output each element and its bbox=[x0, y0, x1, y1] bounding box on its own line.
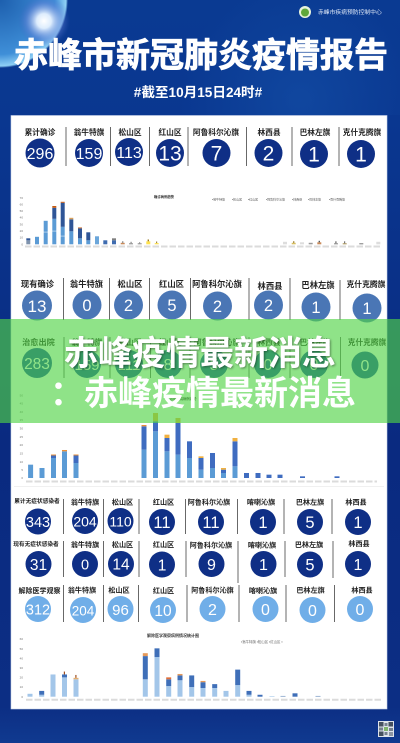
chart title: 确诊病例趋势 bbox=[154, 194, 175, 199]
stat: 阿鲁科尔沁旗 11: 11 bbox=[202, 514, 220, 532]
stat: 红山区 10 bbox=[150, 586, 176, 623]
stat: 红山区 10: 10 bbox=[154, 603, 172, 620]
stat: 阿鲁科尔沁旗 11 bbox=[188, 498, 230, 535]
stat: 林西县 2: 林西县 bbox=[257, 127, 281, 137]
stat: 松山区 2: 2 bbox=[124, 297, 133, 315]
stat: 红山区 1: 1 bbox=[158, 558, 166, 574]
stats row: current asymptomatic bbox=[13, 539, 371, 583]
header logo: disease control center: 赤峰市疾病预防控制中心 bbox=[318, 8, 382, 16]
stat: 巴林左旗 0 bbox=[300, 337, 331, 378]
stat: 松山区 113: 松山区 bbox=[118, 127, 142, 137]
stat: 阿鲁科尔沁旗 7: 阿鲁科尔沁旗 bbox=[193, 127, 239, 137]
y axis labels: 0 bbox=[21, 242, 23, 246]
stat: 治愈出院 283: 治愈出院 bbox=[22, 337, 55, 347]
y axis labels: 0 bbox=[21, 695, 23, 699]
stat: 巴林左旗 1: 1 bbox=[308, 144, 320, 166]
stacked bars bbox=[28, 648, 320, 697]
stat: 巴林左旗 1: 1 bbox=[311, 299, 321, 317]
stat: 红山区 5: 5 bbox=[167, 297, 177, 315]
chart legend: ▪翁牛特旗 ▪松山区 ▪红山区 ▪ bbox=[241, 639, 283, 644]
stat: 阿鲁科尔沁旗 11: 阿鲁科尔沁旗 bbox=[188, 498, 230, 506]
header logo: disease control center bbox=[299, 6, 382, 18]
stat: 松山区 110: 松山区 bbox=[112, 498, 133, 506]
stat: 现有无症状感染者 31 bbox=[13, 540, 59, 577]
stat: 喀喇沁旗 0: 0 bbox=[261, 602, 270, 619]
banner headline line 2: ：赤峰疫情最新消息 bbox=[50, 375, 356, 413]
y axis labels bbox=[20, 394, 23, 480]
chart legend: ▪红山区 bbox=[248, 196, 258, 202]
stat: 巴林左旗 5 bbox=[295, 540, 323, 578]
stat: 现有确诊 13: 现有确诊 bbox=[21, 279, 55, 289]
y axis labels: 20 bbox=[20, 443, 23, 447]
stat: 松山区 110 bbox=[108, 498, 134, 534]
stat: 红山区 8: 8 bbox=[164, 357, 173, 374]
stat: 翁牛特旗 0: 翁牛特旗 bbox=[70, 279, 104, 289]
stat: 松山区 14: 14 bbox=[112, 556, 130, 574]
y axis labels: 20 bbox=[20, 676, 23, 680]
stat: 阿鲁科尔沁旗 2: 2 bbox=[208, 602, 217, 619]
stat: 喀喇沁旗 1 bbox=[248, 540, 276, 577]
stat: 红山区 13: 红山区 bbox=[158, 127, 182, 137]
stat: 喀喇沁旗 1: 1 bbox=[258, 514, 268, 532]
stat: 阿鲁科尔沁旗 2: 阿鲁科尔沁旗 bbox=[191, 586, 234, 594]
stat: 解除医学观察 312: 解除医学观察 bbox=[18, 586, 60, 595]
stat: 巴林左旗 5: 5 bbox=[305, 556, 315, 574]
stacked bars bbox=[26, 202, 380, 244]
chart title: 解除医学观察病例情况统计图 bbox=[147, 632, 199, 638]
banner headline line 1: 赤峰疫情最新消息 bbox=[64, 335, 336, 373]
stat: 林西县 2 bbox=[254, 281, 283, 320]
stat: 林西县 1: 林西县 bbox=[345, 498, 367, 506]
stat: 林西县 1: 林西县 bbox=[348, 539, 370, 548]
chart legend: ▪巴林左旗 bbox=[308, 196, 321, 202]
y axis labels bbox=[20, 637, 23, 699]
stat: 克什克腾旗 0: 克什克腾旗 bbox=[348, 337, 387, 347]
chart: cured cases by date bbox=[14, 394, 384, 487]
y axis labels: 45 bbox=[20, 402, 23, 406]
stat: 林西县 2: 林西县 bbox=[258, 281, 282, 291]
stat: 翁牛特旗 204: 204 bbox=[72, 604, 95, 618]
stat: 巴林左旗 0: 0 bbox=[308, 603, 317, 620]
stat: 松山区 111: 松山区 bbox=[118, 337, 142, 347]
stat: 累计确诊 296 bbox=[25, 127, 56, 168]
y axis labels: 40 bbox=[20, 656, 23, 660]
stat: 喀喇沁旗 1: 喀喇沁旗 bbox=[248, 540, 276, 550]
y axis labels: 15 bbox=[20, 452, 23, 456]
stat: 松山区 111: 111 bbox=[118, 357, 140, 374]
title: 赤峰市新冠肺炎疫情报告 bbox=[14, 37, 388, 75]
stat: 阿鲁科尔沁旗 2: 阿鲁科尔沁旗 bbox=[192, 279, 243, 289]
stat: 林西县 0: 0 bbox=[356, 602, 365, 619]
stat: 喀喇沁旗 1: 1 bbox=[259, 557, 268, 574]
decorative planet and light flare bbox=[0, 0, 70, 68]
stat: 林西县 2: 2 bbox=[263, 142, 274, 166]
stat: 松山区 111 bbox=[115, 337, 143, 378]
stat: 阿鲁科尔沁旗 5: 阿鲁科尔沁旗 bbox=[194, 337, 240, 347]
stat: 巴林左旗 0: 巴林左旗 bbox=[296, 586, 325, 594]
stat: 红山区 1 bbox=[149, 540, 175, 578]
stat: 林西县 0 bbox=[347, 586, 373, 622]
stat: 阿鲁科尔沁旗 9: 阿鲁科尔沁旗 bbox=[190, 540, 232, 550]
y axis labels: 40 bbox=[20, 216, 23, 220]
stat: 喀喇沁旗 0: 喀喇沁旗 bbox=[249, 586, 277, 595]
stat: 阿鲁科尔沁旗 2 bbox=[192, 279, 243, 320]
chart legend: ▪松山区 bbox=[232, 196, 242, 202]
y axis labels: 10 bbox=[20, 685, 23, 689]
stat: 克什克腾旗 0 bbox=[348, 337, 387, 378]
stat: 现有无症状感染者 31: 31 bbox=[30, 557, 47, 574]
stat: 松山区 113: 113 bbox=[116, 145, 142, 162]
stat: 翁牛特旗 0 bbox=[70, 279, 104, 320]
stat: 林西县 2 bbox=[254, 127, 282, 167]
y axis labels: 0 bbox=[21, 476, 23, 480]
y axis labels: 5 bbox=[21, 468, 23, 472]
y axis labels: 10 bbox=[20, 460, 23, 464]
stat: 红山区 5: 红山区 bbox=[159, 279, 184, 289]
chart legend: ▪克什克腾旗 bbox=[329, 196, 345, 202]
stats row: cured and discharged bbox=[22, 337, 387, 378]
stat: 红山区 1: 红山区 bbox=[153, 540, 174, 549]
stat: 红山区 10: 红山区 bbox=[153, 586, 174, 595]
stat: 翁牛特旗 159 bbox=[72, 337, 103, 378]
stats row: cumulative asymptomatic bbox=[14, 497, 371, 535]
stat: 翁牛特旗 159: 159 bbox=[74, 357, 100, 374]
y axis labels: 10 bbox=[20, 236, 23, 240]
stat: 累计确诊 296: 累计确诊 bbox=[25, 127, 56, 137]
stat: 累计确诊 296: 296 bbox=[27, 146, 53, 163]
stacked bars bbox=[28, 413, 339, 478]
stat: 红山区 8 bbox=[154, 337, 182, 378]
stat: 翁牛特旗 204 bbox=[71, 498, 99, 534]
stat: 松山区 2 bbox=[114, 279, 143, 320]
stat: 翁牛特旗 0 bbox=[71, 540, 99, 577]
stat: 治愈出院 283: 283 bbox=[24, 356, 50, 373]
green overlay banner bbox=[0, 319, 400, 423]
y axis labels: 30 bbox=[20, 426, 23, 430]
stat: 翁牛特旗 159: 翁牛特旗 bbox=[74, 127, 105, 137]
stat: 巴林左旗 5: 巴林左旗 bbox=[295, 540, 323, 549]
y axis labels: 70 bbox=[20, 196, 23, 200]
y axis labels: 60 bbox=[20, 202, 23, 206]
chart legend: ▪林西县 bbox=[292, 196, 302, 202]
stat: 翁牛特旗 204 bbox=[68, 586, 96, 623]
stat: 喀喇沁旗 0 bbox=[249, 586, 278, 622]
y axis labels: 60 bbox=[20, 637, 23, 641]
stat: 阿鲁科尔沁旗 5 bbox=[194, 337, 240, 378]
stats row: released from medical observation bbox=[18, 585, 373, 623]
stat: 克什克腾旗 1 bbox=[343, 127, 382, 168]
stat: 松山区 110: 110 bbox=[109, 514, 132, 530]
stat: 林西县 2: 2 bbox=[264, 297, 273, 315]
stat: 解除医学观察 312: 312 bbox=[26, 602, 50, 618]
y axis labels: 50 bbox=[20, 647, 23, 651]
stat: 克什克腾旗 0: 0 bbox=[361, 358, 370, 375]
stat: 红山区 8: 红山区 bbox=[158, 337, 182, 347]
stat: 阿鲁科尔沁旗 7 bbox=[193, 127, 239, 167]
stat: 松山区 14 bbox=[108, 540, 134, 577]
chart: confirmed cases by date bbox=[20, 194, 382, 246]
stats row: current confirmed bbox=[21, 278, 386, 322]
chart legend bbox=[212, 196, 345, 202]
subtitle: report date: #截至10月15日24时# bbox=[134, 84, 263, 100]
chart: released from observation by date bbox=[20, 632, 382, 700]
stat: 治愈出院 283 bbox=[22, 337, 55, 378]
stat: 现有确诊 13 bbox=[21, 279, 55, 320]
chart legend: ▪翁牛特旗 bbox=[212, 196, 225, 202]
stat: 喀喇沁旗 1 bbox=[247, 498, 276, 535]
stat: 阿鲁科尔沁旗 5: 5 bbox=[210, 357, 219, 374]
stat: 克什克腾旗 1: 1 bbox=[362, 300, 372, 318]
y axis labels: 35 bbox=[20, 418, 23, 422]
stat: 翁牛特旗 159: 翁牛特旗 bbox=[72, 337, 103, 347]
stat: 巴林左旗 0 bbox=[296, 586, 326, 623]
stat: 红山区 11: 红山区 bbox=[153, 498, 174, 506]
stat: 松山区 2: 松山区 bbox=[118, 279, 142, 289]
stat: 红山区 5 bbox=[158, 279, 186, 320]
chart legend: ▪阿鲁科尔沁旗 bbox=[266, 196, 285, 202]
stat: 巴林左旗 0: 0 bbox=[310, 357, 319, 374]
stat: 现有确诊 13: 13 bbox=[28, 297, 46, 316]
stat: 累计无症状感染者 343: 343 bbox=[26, 515, 50, 531]
stat: 阿鲁科尔沁旗 9: 9 bbox=[207, 557, 216, 574]
QR code bbox=[378, 721, 394, 737]
y axis labels: 30 bbox=[20, 666, 23, 670]
stat: 红山区 13: 13 bbox=[158, 142, 182, 166]
stat: 松山区 14: 松山区 bbox=[112, 540, 133, 549]
stats row: cumulative confirmed bbox=[25, 127, 382, 168]
stat: 克什克腾旗 1: 1 bbox=[355, 144, 367, 166]
stat: 林西县 1: 1 bbox=[353, 514, 363, 532]
stat: 松山区 96: 松山区 bbox=[108, 586, 130, 594]
stat: 喀喇沁旗 1: 喀喇沁旗 bbox=[247, 498, 275, 506]
stat: 阿鲁科尔沁旗 9 bbox=[190, 540, 232, 577]
y axis labels: 25 bbox=[20, 435, 23, 439]
stat: 阿鲁科尔沁旗 2 bbox=[191, 586, 234, 622]
stat: 松山区 96: 96 bbox=[112, 602, 129, 619]
y axis labels: 50 bbox=[20, 209, 23, 213]
stat: 松山区 113 bbox=[115, 127, 143, 166]
stat: 翁牛特旗 0: 0 bbox=[81, 558, 89, 574]
y axis labels: 20 bbox=[20, 229, 23, 233]
stat: 巴林左旗 1 bbox=[301, 280, 335, 322]
stat: 现有无症状感染者 31: 现有无症状感染者 bbox=[13, 540, 59, 548]
stat: 翁牛特旗 204: 204 bbox=[73, 514, 97, 530]
stat: 林西县 1 bbox=[345, 498, 371, 535]
y axis labels: 50 bbox=[20, 394, 23, 398]
white content panel bbox=[11, 116, 387, 709]
stat: 翁牛特旗 0: 翁牛特旗 bbox=[71, 540, 99, 549]
stat: 克什克腾旗 1: 克什克腾旗 bbox=[343, 127, 382, 137]
stat: 松山区 96 bbox=[108, 586, 134, 622]
stat: 巴林左旗 0: 巴林左旗 bbox=[300, 337, 331, 347]
stat: 林西县 0: 0 bbox=[264, 357, 273, 374]
stat: 翁牛特旗 204: 翁牛特旗 bbox=[71, 498, 99, 506]
stat: 林西县 1 bbox=[345, 539, 371, 577]
stat: 林西县 1: 1 bbox=[354, 557, 363, 574]
stat: 翁牛特旗 204: 翁牛特旗 bbox=[68, 586, 96, 594]
stat: 巴林左旗 5 bbox=[296, 498, 324, 535]
stat: 翁牛特旗 0: 0 bbox=[82, 297, 92, 315]
stat: 红山区 11 bbox=[149, 498, 175, 535]
chart title: 治愈出院病例趋势 bbox=[169, 396, 197, 401]
stat: 巴林左旗 5: 5 bbox=[305, 514, 315, 532]
stat: 林西县 0 bbox=[254, 337, 282, 378]
y axis labels bbox=[20, 196, 23, 246]
stat: 翁牛特旗 159: 159 bbox=[76, 146, 102, 163]
stat: 巴林左旗 1: 巴林左旗 bbox=[300, 127, 331, 137]
stat: 克什克腾旗 1: 克什克腾旗 bbox=[347, 279, 386, 289]
stat: 红山区 11: 11 bbox=[153, 514, 171, 532]
stat: 累计无症状感染者 343 bbox=[14, 497, 60, 534]
stat: 林西县 0: 林西县 bbox=[257, 337, 281, 347]
y axis labels: 30 bbox=[20, 222, 23, 226]
stat: 红山区 13 bbox=[156, 127, 184, 167]
stat: 林西县 0: 林西县 bbox=[351, 586, 373, 594]
stat: 巴林左旗 1: 巴林左旗 bbox=[301, 280, 335, 290]
stat: 解除医学观察 312 bbox=[18, 586, 60, 622]
stat: 巴林左旗 1 bbox=[300, 127, 331, 168]
stat: 阿鲁科尔沁旗 2: 2 bbox=[213, 298, 222, 316]
stat: 累计无症状感染者 343: 累计无症状感染者 bbox=[14, 497, 60, 505]
stat: 阿鲁科尔沁旗 7: 7 bbox=[211, 142, 222, 166]
stat: 翁牛特旗 159 bbox=[74, 127, 105, 167]
stat: 巴林左旗 5: 巴林左旗 bbox=[296, 498, 324, 506]
y axis labels: 40 bbox=[20, 410, 23, 414]
stat: 克什克腾旗 1 bbox=[347, 279, 386, 322]
